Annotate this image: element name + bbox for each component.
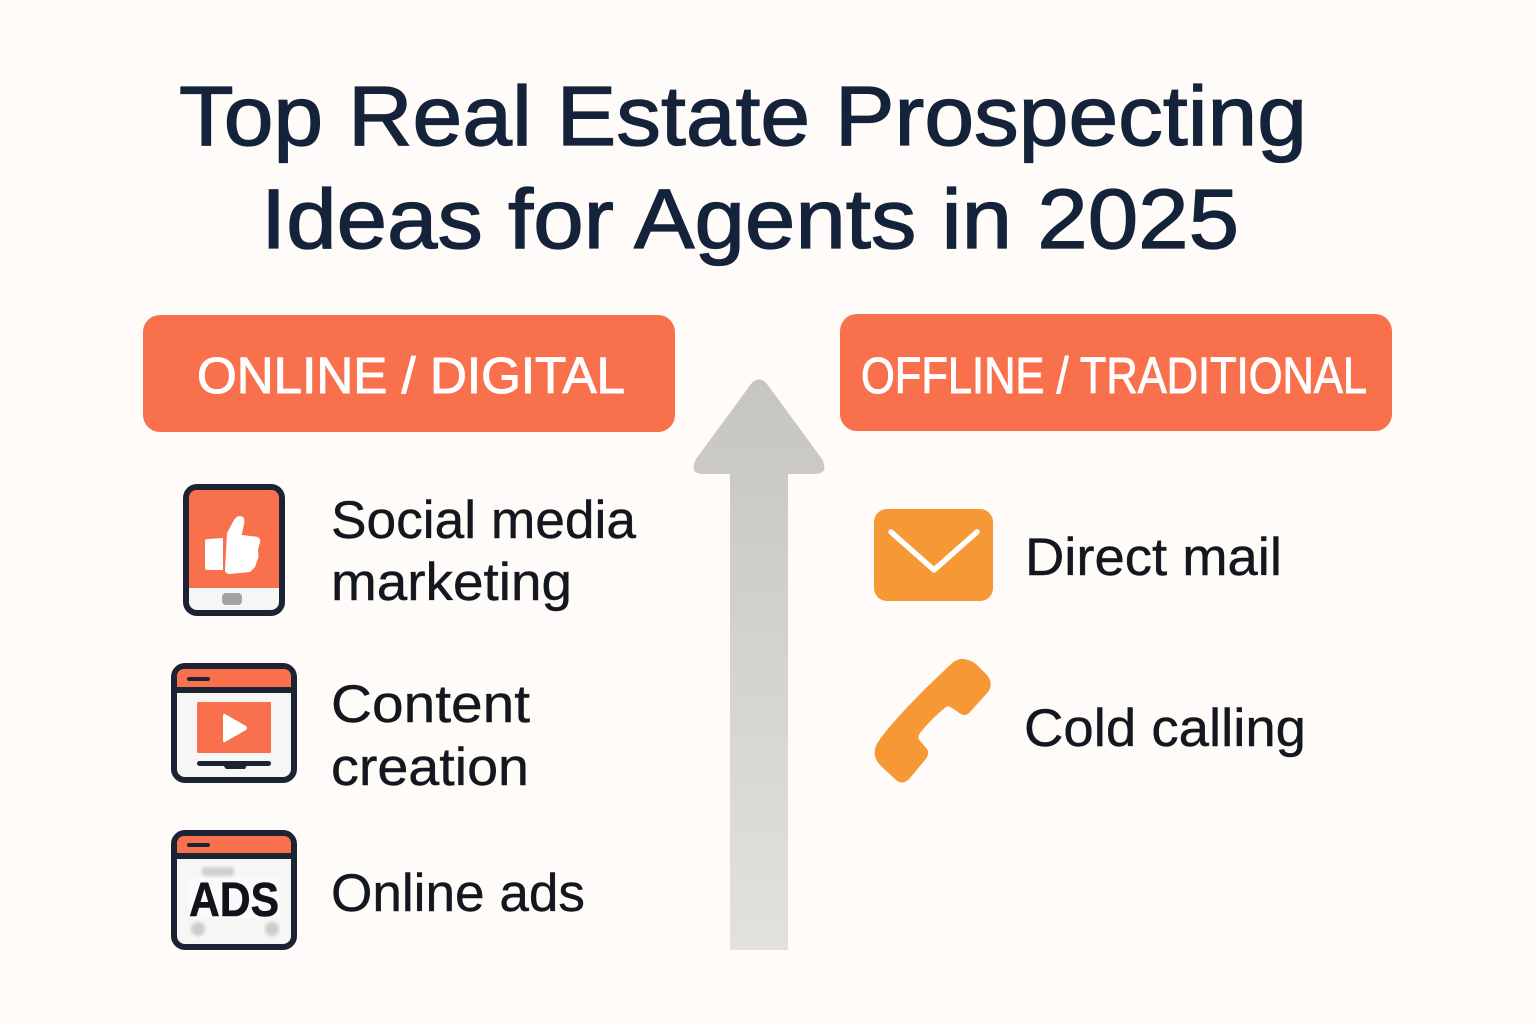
icon: envelope: [874, 509, 993, 601]
label: direct mail: Direct mail: [1025, 528, 1282, 587]
label: social media marketing: marketing: [331, 553, 572, 612]
icon: video browser window: [174, 666, 294, 780]
icon: ads browser window: ADS: [189, 874, 279, 927]
offline item: direct mail: [874, 509, 1282, 601]
label: social media marketing: [331, 491, 637, 612]
label: content creation: creation: [331, 738, 529, 797]
title: Top Real Estate Prospecting: [179, 69, 1307, 163]
title: [179, 69, 1307, 266]
icon: telephone handset: [875, 659, 991, 783]
label: online ads: Online ads: [331, 864, 585, 923]
label: social media marketing: Social media: [331, 491, 637, 550]
icon: ads browser window: [174, 833, 294, 947]
icon: tablet with thumbs up: [186, 487, 282, 613]
panel header: offline / traditional: OFFLINE / TRADITIONAL: [861, 347, 1367, 404]
label: cold calling: Cold calling: [1024, 699, 1306, 758]
online item: online ads: [174, 833, 585, 947]
offline item: cold calling: [875, 659, 1306, 783]
online item: social media marketing: [186, 487, 637, 613]
label: content creation: [331, 675, 530, 797]
online item: content creation: [174, 666, 530, 797]
title: Ideas for Agents in 2025: [261, 172, 1239, 266]
label: content creation: Content: [331, 675, 530, 734]
arrow pointing up: [694, 380, 824, 950]
panel header: online / digital: ONLINE / DIGITAL: [197, 347, 625, 404]
panel header: offline / traditional: [840, 314, 1392, 431]
panel header: online / digital: [143, 315, 675, 432]
